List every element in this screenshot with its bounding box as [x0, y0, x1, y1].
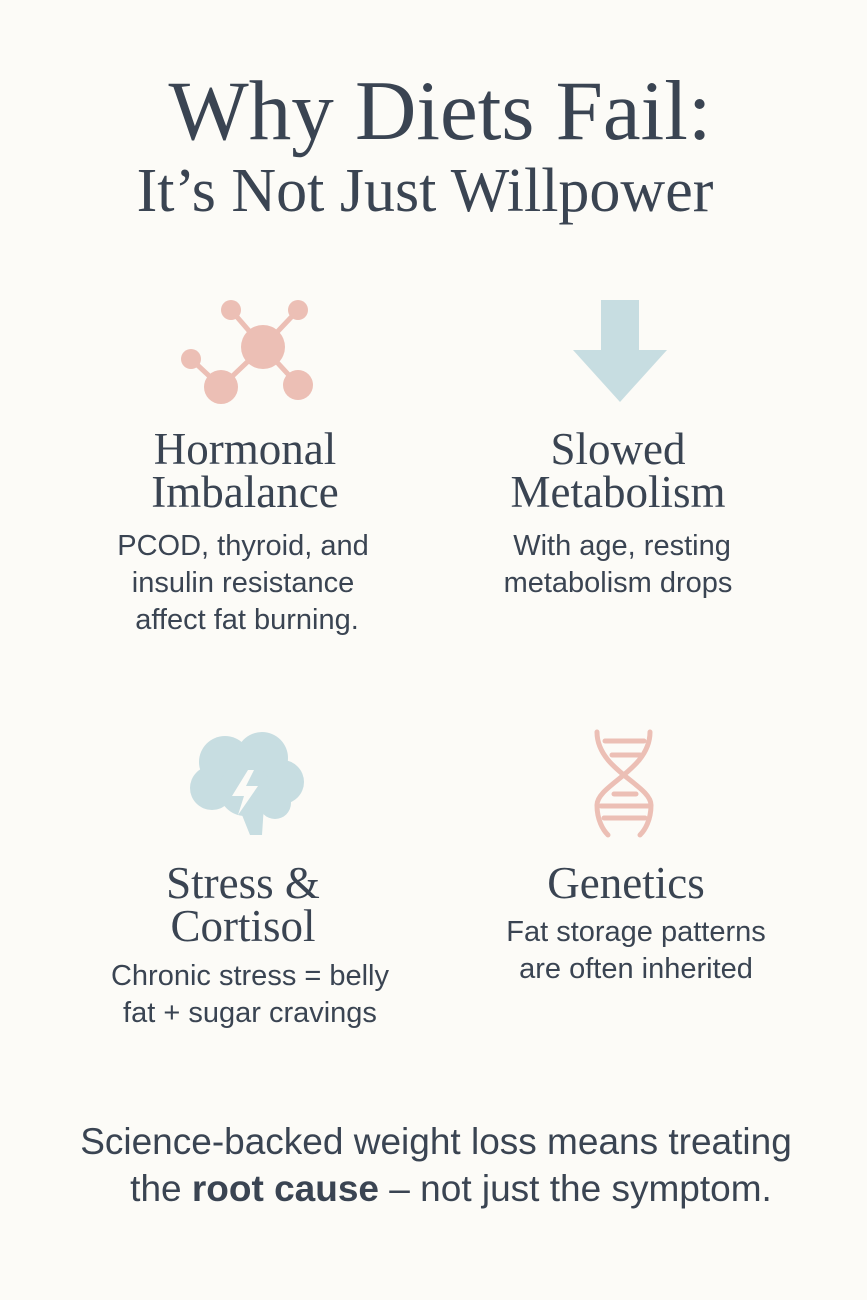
subtitle: It’s Not Just Willpower: [137, 157, 713, 225]
footer statement: Science-backed weight loss means treating: [80, 1121, 792, 1162]
icon: dna: [594, 730, 654, 838]
icon: brain: [190, 732, 304, 835]
heading: hormonal: [151, 424, 339, 517]
heading: genetics: Genetics: [547, 858, 705, 908]
text: hormonal: PCOD, thyroid, and: [117, 530, 369, 562]
text: hormonal: [117, 530, 369, 636]
text: hormonal: affect fat burning.: [135, 604, 359, 636]
heading: stress: Cortisol: [170, 901, 316, 951]
panel: metabolism: [504, 424, 732, 599]
heading: stress: [166, 858, 320, 951]
text: genetics: [506, 916, 766, 985]
text: stress: Chronic stress = belly: [111, 960, 389, 992]
text: genetics: are often inherited: [519, 953, 753, 985]
heading: metabolism: Metabolism: [511, 467, 725, 517]
text: stress: [111, 960, 389, 1029]
panel: genetics: [506, 858, 766, 985]
text: genetics: Fat storage patterns: [506, 916, 766, 948]
panel: hormonal: [117, 424, 369, 636]
text: stress: fat + sugar cravings: [123, 997, 377, 1029]
heading: stress: Stress &: [166, 858, 320, 908]
text: hormonal: insulin resistance: [132, 567, 354, 599]
panel: stress: [111, 858, 389, 1029]
footer statement: the root cause – not just the symptom.: [130, 1168, 772, 1209]
title: Why Diets Fail:: [168, 64, 712, 158]
heading: hormonal: Imbalance: [151, 467, 339, 517]
heading: metabolism: [511, 424, 725, 517]
heading: metabolism: Slowed: [550, 424, 685, 474]
footer statement: [80, 1121, 792, 1209]
icon: molecule: [181, 300, 313, 404]
text: metabolism: [504, 530, 732, 599]
icon: down arrow: [573, 300, 667, 402]
text: metabolism: metabolism drops: [504, 567, 732, 599]
heading: hormonal: Hormonal: [154, 424, 336, 474]
text: metabolism: With age, resting: [513, 530, 731, 562]
